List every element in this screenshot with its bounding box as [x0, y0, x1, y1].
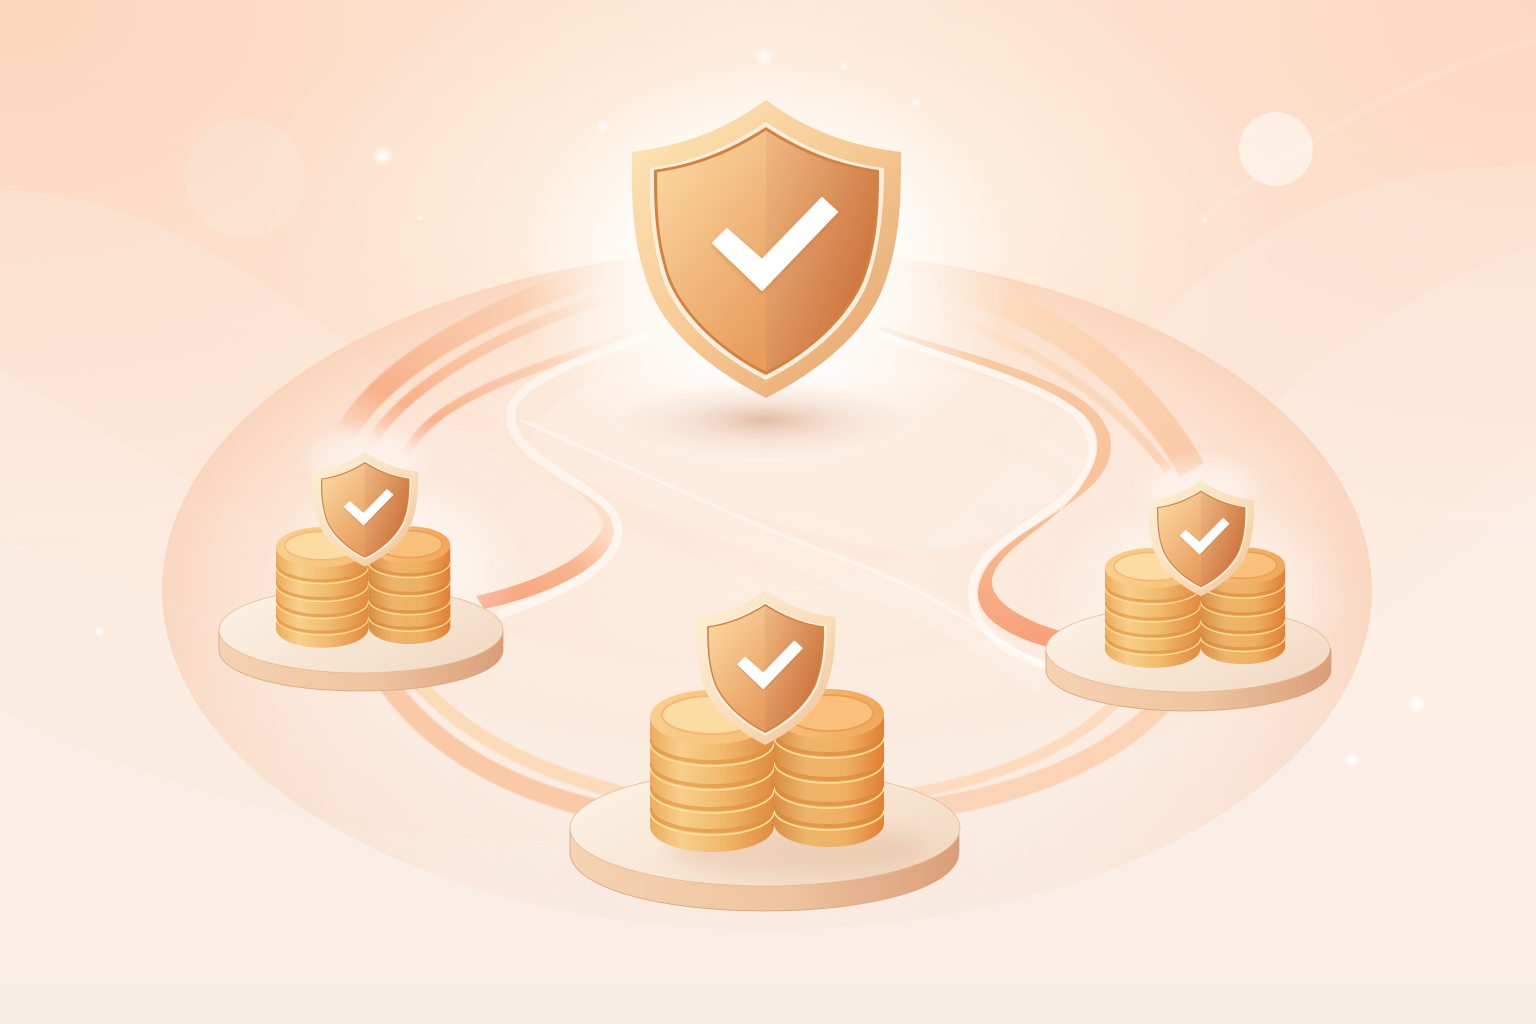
- small shield: [1148, 480, 1254, 596]
- coins: [276, 526, 450, 648]
- coins: [650, 689, 884, 852]
- coins: [1105, 547, 1285, 668]
- connector arcs: bottom left: [385, 680, 630, 812]
- platform glow: [265, 420, 525, 670]
- stack: right platform: [1046, 450, 1350, 711]
- main shield: [632, 100, 901, 398]
- platform base: [219, 630, 503, 691]
- central light blob: [530, 356, 1089, 551]
- platform base: [1046, 649, 1331, 711]
- platform top: [219, 587, 503, 673]
- stack: left platform: [219, 420, 525, 691]
- connector: left S-curve: [476, 335, 650, 615]
- stack: front platform: [570, 590, 960, 911]
- connector arcs: bottom right: [900, 692, 1170, 810]
- orbit ring: [162, 250, 1372, 930]
- platform top: [1046, 606, 1330, 692]
- platform top: [570, 770, 960, 886]
- coin shadow: [670, 824, 930, 876]
- small shield: [312, 452, 418, 567]
- platform glow: [1050, 450, 1350, 690]
- shield ground shadow: [615, 382, 915, 458]
- connector arcs: top right: [905, 272, 1192, 470]
- small shield: [696, 590, 836, 745]
- connector: right S-curve: [880, 326, 1111, 665]
- shield glow: [516, 60, 1016, 480]
- decorative circles: [185, 112, 1313, 238]
- sparkles: [94, 47, 1427, 768]
- connector: white diagonal ribbon: [520, 420, 1045, 680]
- connector arcs: top left: [342, 262, 650, 456]
- platform base: [570, 828, 959, 911]
